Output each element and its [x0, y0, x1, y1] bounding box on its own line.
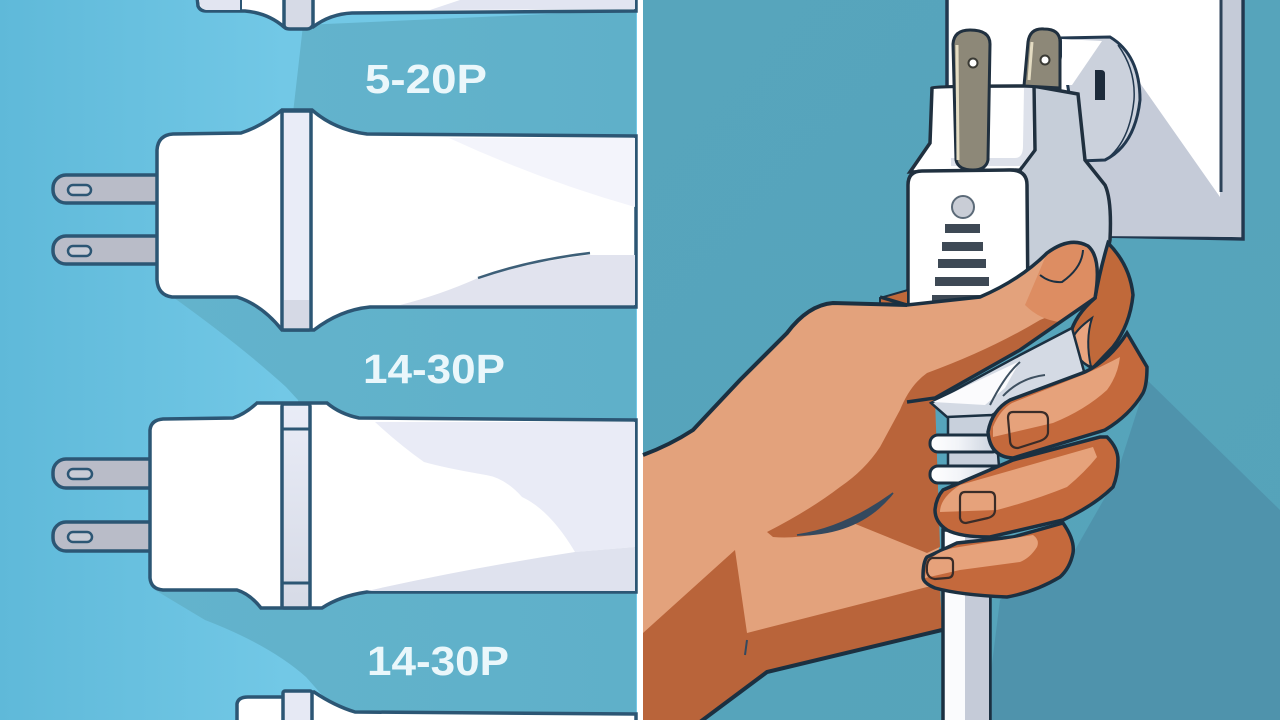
- extension plug body: [908, 86, 1110, 310]
- finger: little: [923, 523, 1073, 597]
- prongs: [953, 29, 1060, 170]
- plug: top partial: [197, 0, 636, 29]
- outlet disc: [1060, 37, 1140, 161]
- finger: middle: [988, 333, 1147, 458]
- hand shading: [643, 550, 942, 720]
- panel: plug types: [0, 0, 637, 720]
- hand shadow: [985, 380, 1280, 720]
- plug shadows: [155, 10, 636, 720]
- label: 5-20P: 5-20P: [365, 56, 487, 102]
- finger: ring: [935, 437, 1118, 537]
- label: 14-30P upper: 14-30P: [363, 346, 505, 392]
- plug: 14-30P lower: [53, 403, 636, 608]
- panel: hand inserting plug: [643, 0, 1280, 720]
- hand: [643, 242, 1097, 720]
- plug: bottom partial: [237, 691, 636, 720]
- lower plug neck and cord: [930, 328, 1085, 720]
- wall outlet plate: [947, 0, 1243, 239]
- fingernails: [927, 412, 1048, 579]
- label: 14-30P lower: 14-30P: [367, 638, 509, 684]
- plug: 14-30P upper: [53, 110, 636, 330]
- finger: index: [1070, 243, 1133, 368]
